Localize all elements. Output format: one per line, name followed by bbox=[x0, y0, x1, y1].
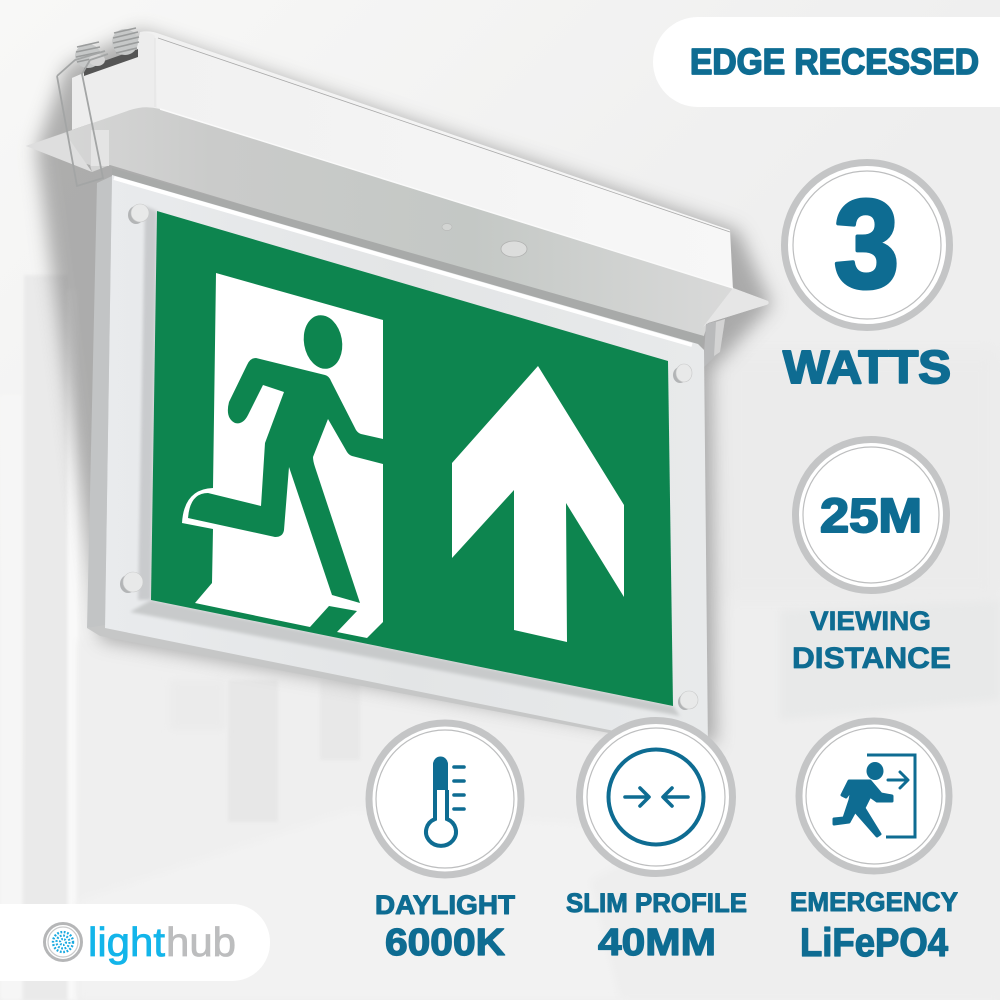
label: DISTANCE bbox=[792, 642, 951, 675]
label bbox=[375, 890, 516, 964]
feature: emergency LiFePO4 bbox=[790, 721, 958, 965]
recessed housing box bbox=[72, 31, 733, 290]
sign edge frame bbox=[87, 168, 709, 752]
feature: viewing distance bbox=[792, 440, 951, 675]
right bracket bbox=[703, 319, 725, 368]
logo mark bbox=[44, 924, 82, 960]
label: SLIM PROFILE bbox=[566, 888, 747, 918]
green sign face bbox=[151, 211, 673, 706]
label: EMERGENCY bbox=[790, 887, 958, 917]
feature: slim profile 40mm bbox=[566, 720, 747, 964]
mounting flange bbox=[26, 107, 769, 342]
badge: edge recessed: EDGE RECESSED bbox=[690, 41, 979, 82]
icon: running person exiting door bbox=[834, 755, 915, 837]
circle badge bbox=[580, 720, 732, 874]
label bbox=[566, 888, 747, 964]
up arrow bbox=[452, 366, 624, 642]
running figure bbox=[188, 312, 383, 603]
drop shadow bbox=[36, 30, 772, 745]
label: DAYLIGHT bbox=[375, 890, 516, 920]
label: 6000K bbox=[385, 922, 506, 964]
circle badge: 25M bbox=[820, 490, 922, 543]
mounting screws bbox=[120, 204, 698, 710]
icon: thermometer bbox=[426, 756, 464, 846]
white doorway bbox=[182, 273, 383, 638]
acrylic plate bbox=[105, 175, 708, 750]
feature: 3 watts bbox=[783, 162, 951, 393]
label bbox=[790, 887, 958, 965]
label: WATTS bbox=[783, 341, 951, 393]
label: LiFePO4 bbox=[800, 921, 949, 965]
logo wordmark bbox=[88, 919, 236, 965]
logo wordmark: hub bbox=[166, 919, 236, 965]
logo wordmark: light bbox=[88, 919, 166, 965]
spring clips bbox=[57, 28, 139, 186]
feature: daylight 6000K bbox=[369, 723, 521, 964]
circle badge: 3 bbox=[834, 175, 899, 314]
label: 40MM bbox=[598, 922, 716, 964]
circle badge bbox=[369, 723, 521, 875]
circle badge bbox=[799, 721, 949, 871]
exit sign luminaire bbox=[26, 28, 772, 752]
label: VIEWING bbox=[810, 606, 931, 636]
logo badge: lighthub bbox=[0, 904, 270, 981]
icon: compress arrows bbox=[608, 750, 704, 844]
circle badge bbox=[796, 440, 946, 590]
circle badge bbox=[784, 162, 950, 328]
badge: edge recessed bbox=[653, 17, 1000, 107]
label bbox=[792, 606, 951, 675]
